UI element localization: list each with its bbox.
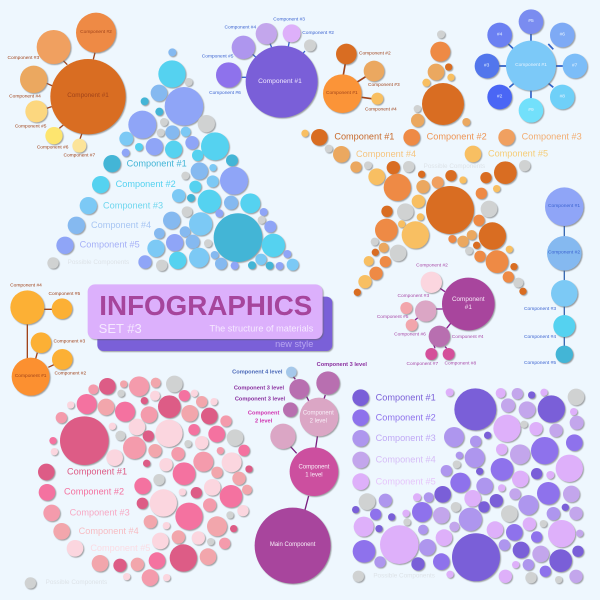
blue triangle cluster with legend — [47, 48, 299, 271]
blue hub diagram: Component #1 — [515, 62, 547, 68]
vertical blue chain — [524, 187, 584, 366]
orange tree diagram small: Component #1 — [326, 90, 358, 96]
purple circle cluster with legend: Component #2 — [376, 413, 436, 423]
level tree diagram: Component — [248, 410, 279, 416]
title banner — [88, 284, 332, 351]
purple component tree: Component — [452, 296, 485, 303]
orange tree diagram: Component #2 — [80, 29, 112, 35]
level tree diagram: 2 level — [310, 418, 327, 424]
yellow-orange tree diagram — [10, 282, 86, 396]
level tree diagram: 1 level — [305, 473, 323, 479]
purple component tree: Component #7 — [406, 361, 438, 367]
orange tree diagram small: Component #2 — [359, 50, 391, 56]
purple component tree: Component #5 — [377, 314, 409, 320]
purple tree diagram top: Component #3 — [273, 16, 305, 22]
blue triangle cluster with legend: Component #1 — [127, 158, 187, 168]
purple component tree: #1 — [465, 304, 472, 311]
orange tree diagram: Component #5 — [15, 123, 47, 129]
purple tree diagram top: Component #6 — [209, 90, 241, 96]
pink circle cluster with legend: Component #2 — [64, 487, 124, 497]
pink circle cluster with legend: Possible Components — [46, 579, 107, 586]
subtitle: The structure of materials — [209, 324, 314, 334]
level tree diagram: Component — [298, 465, 330, 471]
blue hub diagram: #7 — [572, 62, 578, 68]
purple tree diagram top — [202, 16, 334, 118]
yellow-orange tree diagram: Component #3 — [53, 338, 85, 344]
purple component tree: Component #6 — [394, 331, 426, 337]
blue hub diagram: #3 — [484, 62, 490, 68]
purple component tree: Component #8 — [444, 360, 476, 366]
orange tree diagram small: Component #3 — [368, 82, 400, 88]
orange tree diagram small: Component #4 — [365, 106, 397, 112]
purple circle cluster with legend: Component #1 — [376, 393, 436, 403]
purple component tree — [377, 262, 495, 367]
yellow-orange tree diagram: Component #2 — [54, 370, 86, 376]
purple tree diagram top: Component #1 — [258, 78, 302, 85]
level tree diagram: Component 3 level — [235, 396, 286, 402]
orange star cluster with legend: Component #4 — [356, 149, 416, 159]
pink circle cluster with legend: Component #5 — [90, 543, 150, 553]
new style note: new style — [275, 339, 313, 349]
level tree diagram: Component — [303, 410, 334, 416]
blue triangle cluster with legend: Component #2 — [116, 179, 176, 189]
orange tree diagram: Component #1 — [67, 92, 109, 99]
level tree diagram: Component 4 level — [232, 370, 283, 376]
purple circle cluster with legend: Component #4 — [376, 455, 436, 465]
blue hub diagram: #6 — [560, 31, 565, 37]
blue triangle cluster with legend: Component #4 — [91, 220, 151, 230]
blue triangle cluster with legend: Component #3 — [103, 200, 163, 210]
purple circle cluster with legend: Component #3 — [376, 433, 436, 443]
pink circle cluster with legend: Component #1 — [67, 467, 127, 477]
purple component tree: Component #4 — [452, 334, 484, 340]
orange tree diagram small — [323, 44, 400, 113]
purple circle cluster with legend — [352, 388, 584, 583]
blue hub diagram — [475, 9, 587, 123]
blue hub diagram: #2 — [497, 93, 503, 99]
level tree diagram: Component 3 level — [317, 362, 367, 368]
banner back panel — [97, 297, 332, 351]
orange star cluster with legend: Component #1 — [334, 132, 394, 142]
orange tree diagram — [7, 13, 126, 158]
level tree diagram: Component 3 level — [234, 385, 285, 391]
title: INFOGRAPHICS — [99, 290, 312, 321]
orange star cluster with legend: Component #2 — [427, 132, 487, 142]
level tree diagram: 2 level — [255, 418, 273, 424]
purple circle cluster with legend: Possible Components — [373, 572, 435, 579]
level tree diagram — [232, 362, 367, 584]
blue triangle cluster with legend: Component #5 — [80, 240, 140, 250]
orange star cluster with legend — [301, 30, 582, 296]
purple circle cluster with legend: Component #5 — [376, 476, 436, 486]
vertical blue chain: Component #3 — [524, 306, 556, 312]
vertical blue chain: Component #2 — [548, 250, 580, 256]
orange star cluster with legend: Component #5 — [488, 149, 548, 159]
pink circle cluster with legend: Component #4 — [79, 526, 139, 536]
blue hub diagram: #5 — [528, 18, 534, 24]
yellow-orange tree diagram: Component #4 — [10, 282, 42, 288]
orange tree diagram: Component #7 — [63, 152, 95, 158]
blue hub diagram: #9 — [528, 107, 534, 113]
purple tree diagram top: Component #4 — [224, 24, 256, 30]
purple component tree: Component #2 — [416, 262, 448, 268]
yellow-orange tree diagram: Component #5 — [48, 291, 80, 297]
vertical blue chain: Component #4 — [524, 334, 556, 340]
orange tree diagram: Component #6 — [37, 144, 69, 150]
vertical blue chain: Component #1 — [548, 203, 580, 209]
orange star cluster with legend: Component #3 — [522, 132, 582, 142]
purple tree diagram top: Component #2 — [302, 30, 334, 36]
orange tree diagram: Component #3 — [7, 55, 39, 61]
level tree diagram: Main Component — [270, 542, 316, 548]
pink circle cluster with legend — [25, 376, 253, 589]
set number: SET #3 — [99, 321, 142, 336]
blue hub diagram: #8 — [560, 93, 565, 99]
orange tree diagram: Component #4 — [9, 93, 41, 99]
yellow-orange tree diagram: Component #1 — [15, 373, 47, 379]
banner front panel — [88, 284, 323, 339]
pink circle cluster with legend: Component #3 — [70, 508, 130, 518]
blue triangle cluster with legend: Possible Components — [68, 259, 129, 266]
purple tree diagram top: Component #5 — [202, 53, 234, 59]
purple component tree: Component #3 — [397, 293, 429, 299]
blue hub diagram: #4 — [497, 31, 503, 37]
orange star cluster with legend: Possible Components — [424, 163, 485, 170]
vertical blue chain: Component #5 — [524, 360, 556, 366]
